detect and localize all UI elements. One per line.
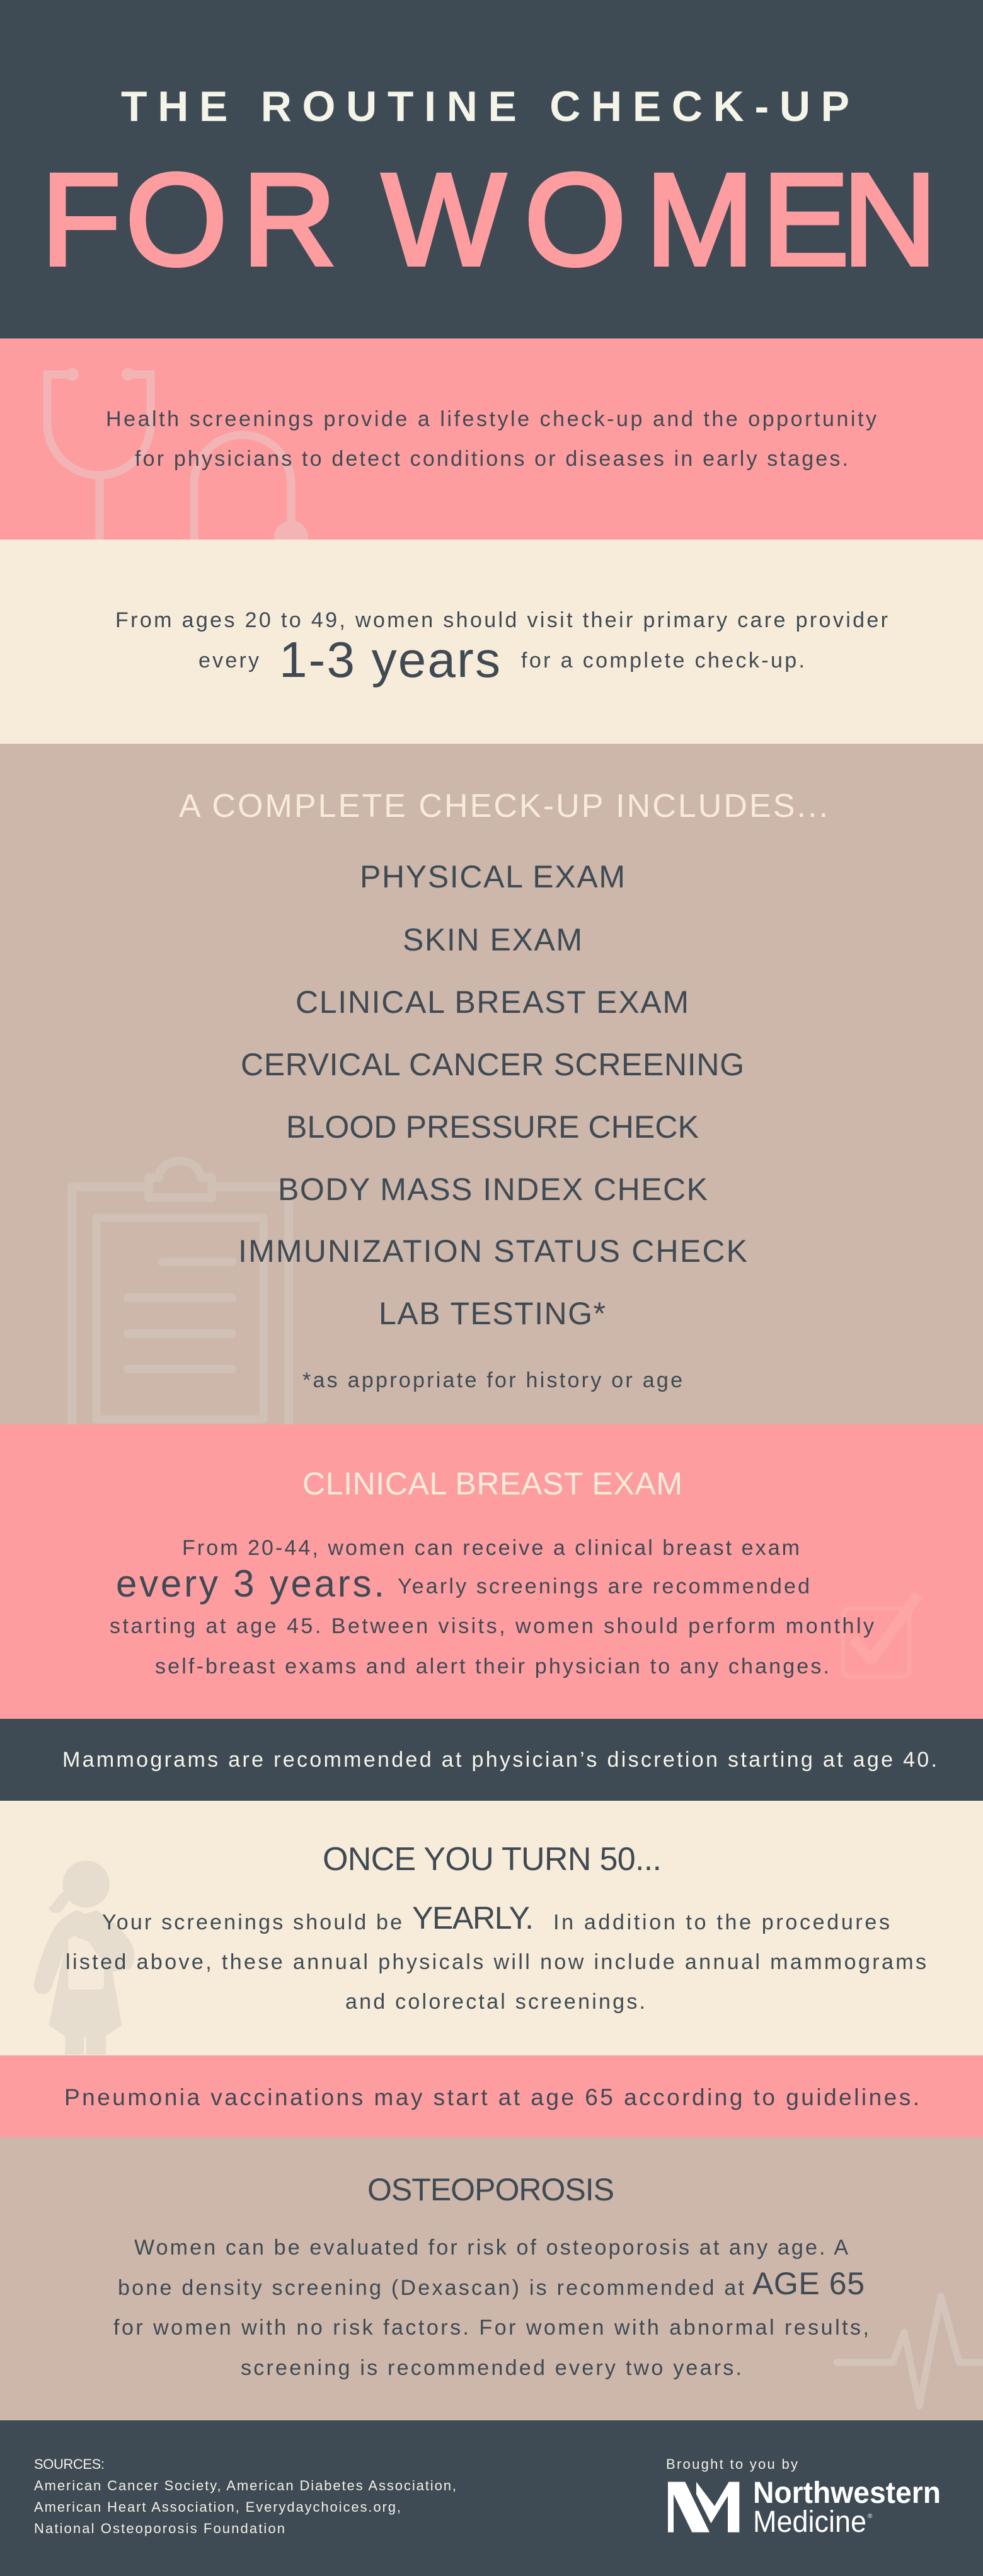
frequency sentence line two: for a complete check-up. — [521, 649, 805, 673]
title: the routine check-up: THE ROUTINE CHECK-UP — [121, 83, 849, 130]
body text: In addition to the procedures — [553, 1910, 890, 1934]
body text: AGE 65 — [752, 2266, 865, 2301]
logo: Northwestern Medicine: ® — [868, 2513, 873, 2520]
intro text — [106, 407, 877, 471]
logo: Northwestern Medicine: Medicine — [753, 2505, 866, 2539]
intro text: for physicians to detect conditions or diseases in early stages. — [135, 447, 848, 471]
sources — [34, 2456, 456, 2536]
frequency sentence line two: 1-3 years — [279, 632, 500, 688]
frequency sentence line two — [198, 632, 805, 688]
icon: clipboard — [72, 1161, 289, 1450]
checklist items: CLINICAL BREAST EXAM — [296, 985, 689, 1020]
body text: Women can be evaluated for risk of osteoporosis at any age. A — [134, 2236, 848, 2260]
sources: American Heart Association, Everydaychoices.org, — [34, 2499, 401, 2515]
body text: self-breast exams and alert their physician to any changes. — [155, 1655, 829, 1678]
checklist items: PHYSICAL EXAM — [360, 859, 625, 894]
body text: starting at age 45. Between visits, women should perform monthly — [110, 1614, 874, 1638]
sources: American Cancer Society, American Diabetes Association, — [34, 2478, 456, 2493]
sources: SOURCES: — [34, 2456, 105, 2472]
panel: health screenings intro — [0, 338, 983, 555]
checklist items: CERVICAL CANCER SCREENING — [241, 1047, 744, 1082]
body text: bone density screening (Dexascan) is recommended at — [118, 2276, 745, 2300]
body text: Your screenings should be — [102, 1910, 402, 1934]
body text — [110, 1536, 874, 1678]
heading: OSTEOPOROSIS — [367, 2172, 614, 2207]
logo: Northwestern Medicine — [668, 2476, 941, 2539]
body text: and colorectal screenings. — [345, 1990, 645, 2014]
panel: osteoporosis — [0, 2137, 983, 2420]
heading: CLINICAL BREAST EXAM — [302, 1466, 682, 1501]
body text — [113, 2236, 869, 2380]
logo: Northwestern Medicine: Northwestern — [753, 2476, 941, 2510]
pneumonia text: Pneumonia vaccinations may start at age 65 according to guidelines. — [64, 2084, 919, 2110]
body text: YEARLY. — [412, 1900, 534, 1936]
icon: stethoscope — [47, 368, 308, 555]
intro text: Health screenings provide a lifestyle check-up and the opportunity — [106, 407, 877, 431]
panel: check-up frequency — [0, 540, 983, 744]
body text — [66, 1900, 926, 2014]
panel: complete check-up list — [0, 744, 983, 1450]
body text: Yearly screenings are recommended — [398, 1574, 810, 1598]
body text: listed above, these annual physicals will now include annual mammograms — [66, 1950, 926, 1974]
frequency sentence line one: From ages 20 to 49, women should visit their primary care provider — [115, 608, 888, 632]
icon: heartbeat line — [837, 2296, 983, 2406]
checklist items: BODY MASS INDEX CHECK — [278, 1172, 708, 1207]
panel: mammograms — [0, 1719, 983, 1801]
icon: woman with clipboard — [34, 1861, 134, 2055]
panel: footer — [0, 2420, 983, 2576]
panel: title header — [0, 0, 983, 338]
body text: every 3 years. — [116, 1562, 384, 1605]
body text: screening is recommended every two years. — [241, 2356, 742, 2380]
checklist items: SKIN EXAM — [403, 922, 582, 957]
checklist items — [238, 859, 747, 1331]
brought to you by: Brought to you by — [666, 2456, 798, 2472]
heading: ONCE YOU TURN 50... — [323, 1841, 662, 1878]
title: for women: FOR WOMEN — [41, 147, 937, 293]
panel: once you turn 50 — [0, 1801, 983, 2055]
heading: A COMPLETE CHECK-UP INCLUDES... — [179, 788, 828, 824]
panel: pneumonia — [0, 2055, 983, 2137]
footnote: *as appropriate for history or age — [302, 1368, 682, 1392]
mammograms text: Mammograms are recommended at physician’s discretion starting at age 40. — [62, 1748, 937, 1772]
panel: clinical breast exam — [0, 1424, 983, 1719]
body text: From 20-44, women can receive a clinical breast exam — [182, 1536, 800, 1560]
checklist items: BLOOD PRESSURE CHECK — [286, 1109, 699, 1145]
icon: checkbox — [843, 1595, 918, 1677]
checklist items: LAB TESTING* — [379, 1296, 606, 1331]
body text: for women with no risk factors. For women with abnormal results, — [113, 2316, 869, 2340]
sources: National Osteoporosis Foundation — [34, 2521, 285, 2536]
checklist items: IMMUNIZATION STATUS CHECK — [238, 1233, 747, 1269]
frequency sentence line two: every — [198, 649, 259, 673]
